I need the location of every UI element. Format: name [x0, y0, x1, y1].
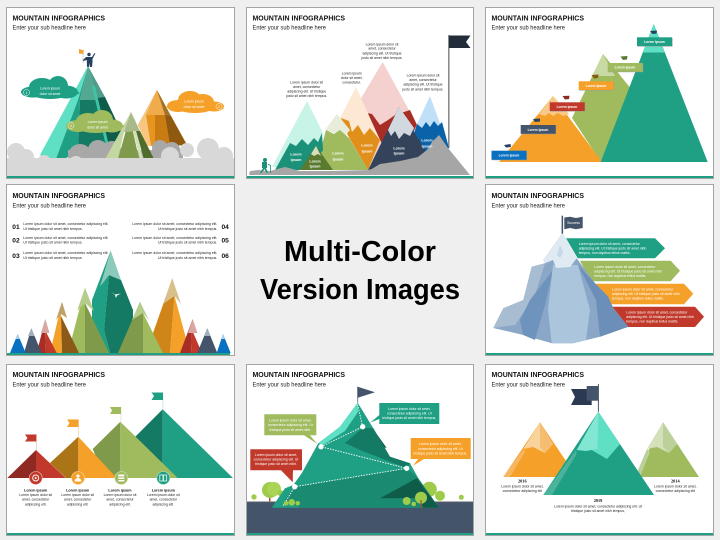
text: red column: [19, 488, 52, 506]
callout: green cloud: Lorem ipsum: [88, 120, 108, 124]
list: left items: [12, 222, 109, 260]
text: teal column: [147, 488, 180, 506]
banner: orange step: [595, 284, 693, 304]
title: central caption: Version Images: [260, 274, 460, 306]
callout: green: Lorem ipsum dolor sit amet,: [269, 418, 312, 422]
illustration: orange flag peak: [50, 419, 117, 478]
illustration: green 2014 peak: [635, 422, 699, 477]
step label: green: [608, 56, 643, 72]
illustration: pink mountain: [340, 62, 420, 170]
callout: orange: [411, 438, 471, 466]
labels: mountain names: Ipsum: [362, 149, 373, 153]
text: red column: adipiscing elit.: [25, 502, 47, 506]
banner: orange step: adipiscing elit. Ut tristique justo sit amet nibh: [612, 292, 680, 296]
labels: mountain names: Ipsum: [394, 151, 405, 155]
text: 2016 note: Lorem ipsum dolor sit amet,: [501, 484, 544, 488]
panel: snow peaks slide: [246, 7, 474, 179]
panel: climbing route slide: [246, 364, 474, 536]
list: right items: [132, 222, 229, 260]
banner: orange step: tempus, non dapibus tellus mattis.: [612, 296, 664, 300]
icon: green stack: [115, 472, 128, 484]
text: orange mountain note: consectetur.: [342, 80, 361, 84]
illustration: teal 2019 peak: [543, 412, 654, 495]
callout: orange cloud: Lorem ipsum: [184, 100, 204, 104]
banner: red step: adipiscing elit. Ut tristique justo sit amet nibh: [626, 315, 694, 319]
banner: green step: adipiscing elit. Ut tristique justo sit amet nibh: [594, 270, 662, 274]
heading: slide 5 title: MOUNTAIN INFOGRAPHICS: [492, 191, 584, 200]
text: orange column: [61, 488, 94, 506]
list: left items: 02: [12, 238, 20, 245]
callout: teal: [370, 403, 439, 424]
banner: green step: tempus, non dapibus tellus mattis.: [594, 274, 646, 278]
callout: red: [250, 449, 302, 482]
text: 2014 note: 2014: [671, 478, 680, 484]
callout: red: consectetur adipiscing elit. Ut: [254, 458, 298, 462]
illustration: teal mountain: [272, 101, 323, 170]
text: pink mountain note: adipiscing elit. Ut tristique: [363, 51, 402, 55]
illustration: teal pyramid mountain: [40, 66, 122, 164]
panel: cloud peaks slide: [6, 7, 235, 179]
text: green column: [104, 488, 136, 506]
icon: climber with flag: [79, 49, 95, 67]
callout: teal: Lorem ipsum dolor sit amet,: [388, 407, 431, 411]
list: right items: Ut tristique justo sit amet nibh tempus.: [158, 227, 217, 231]
labels: mountain names: Lorem: [421, 138, 433, 142]
list: left items: 01: [12, 224, 20, 231]
text: teal mountain note: amet, consectetur: [293, 85, 321, 89]
list: left items: Lorem ipsum dolor sit amet, consectetur adipiscing elit.: [23, 222, 109, 226]
illustration: green pyramid mountain: [103, 112, 156, 163]
callout: green: tristique justo sit amet nibh.: [269, 428, 311, 432]
illustration: orange mountain: [499, 96, 602, 162]
text: 2019 note: Lorem ipsum dolor sit amet, consectetur adipiscing elit. Ut: [554, 504, 642, 508]
text: 2014 note: [654, 478, 697, 493]
callout: orange: tristique justo sit amet nibh tempus,: [413, 452, 467, 456]
labels: mountain names: Lorem: [290, 152, 302, 156]
callout: orange: consectetur adipiscing elit. Ut: [418, 447, 463, 451]
icon: red target: [29, 472, 42, 484]
labels: mountain names: [290, 138, 433, 168]
text: 2014 note: Lorem ipsum dolor sit amet,: [654, 484, 697, 488]
icon: orange person: [72, 472, 84, 484]
text: slide 6 sub headline: Enter your sub headline here: [12, 381, 86, 388]
illustration: grey ridge: [249, 135, 470, 175]
illustration: orange right peak: [146, 278, 190, 353]
text: teal column: amet, consectetur: [150, 498, 178, 502]
illustration: slate peaks: [24, 328, 217, 353]
illustration: green flag peak: [93, 407, 178, 478]
illustration: light grey foreground clouds: [7, 138, 234, 176]
text: orange mountain note: Lorem ipsum: [342, 71, 362, 75]
icon: white bird: [111, 292, 121, 298]
labels: mountain names: Lorem: [361, 143, 373, 147]
illustration: dotted route: [283, 405, 409, 506]
list: right items: Lorem ipsum dolor sit amet, consectetur adipiscing elit.: [132, 222, 217, 226]
list: left items: Ut tristique justo sit amet nibh tempus.: [23, 227, 83, 231]
illustration: dark grey back cloud: [68, 140, 183, 170]
text: orange column: amet, consectetur: [64, 498, 92, 502]
callout: green cloud: 3: [70, 124, 72, 128]
list: right items: 05: [222, 238, 229, 245]
text: red column: Lorem ipsum: [24, 488, 48, 492]
panel: rocky mountain steps slide: [485, 184, 714, 356]
banner: green step: Lorem ipsum dolor sit amet, consectetur: [594, 265, 656, 269]
text: orange column: Lorem ipsum: [66, 488, 90, 492]
callout: red: tristique justo sit amet nibh.: [255, 462, 297, 466]
text: green column: adipiscing elit.: [109, 502, 131, 506]
banner: teal step: Lorem ipsum dolor sit amet, consectetur: [579, 242, 641, 246]
illustration: foreground trees: [284, 492, 427, 508]
text: orange column: adipiscing elit.: [67, 502, 89, 506]
text: blue mountain note: justo sit amet nibh tempus.: [402, 87, 443, 91]
text: red column: amet, consectetur: [22, 498, 50, 502]
text: slide 1 sub headline: Enter your sub headline here: [12, 24, 86, 31]
list: right items: Lorem ipsum dolor sit amet, consectetur adipiscing elit.: [132, 251, 217, 255]
illustration: orange 2016 peak: [503, 422, 577, 477]
callout: green: [264, 414, 317, 444]
text: blue mountain note: Lorem ipsum dolor sit: [407, 73, 439, 77]
text: red column: Lorem ipsum dolor sit: [19, 493, 52, 497]
text: slide 5 sub headline: Enter your sub headline here: [492, 202, 565, 209]
text: 2019 note: tristique justo sit amet nibh tempus,: [571, 509, 625, 513]
text: pink mountain note: amet, consectetur: [368, 47, 397, 51]
banner: red step: tempus, non dapibus tellus mattis.: [626, 320, 678, 324]
list: right items: 04: [222, 224, 229, 231]
panel: timeline peaks slide: [485, 364, 714, 536]
heading: slide 1 title: MOUNTAIN INFOGRAPHICS: [12, 13, 105, 22]
banner: red step: [612, 307, 704, 327]
illustration: red peaks: [37, 319, 202, 353]
illustration: central teal peak: [92, 251, 133, 353]
heading: slide 3 title: MOUNTAIN INFOGRAPHICS: [492, 13, 584, 22]
text: slide 2 sub headline: Enter your sub headline here: [252, 24, 326, 31]
callout: green: consectetur adipiscing elit. Ut: [268, 423, 313, 427]
list: left items: Lorem ipsum dolor sit amet, consectetur adipiscing elit.: [23, 251, 109, 255]
icon: ribbon flag: [571, 384, 599, 412]
step label: slate: [521, 118, 556, 134]
list: left items: 03: [12, 253, 20, 260]
illustration: red flag peak: [7, 434, 66, 478]
list: left items: Lorem ipsum dolor sit amet, consectetur adipiscing elit.: [23, 236, 109, 240]
heading: slide 8 title: MOUNTAIN INFOGRAPHICS: [492, 370, 584, 379]
text: teal mountain note: adipiscing elit. Ut tristique: [287, 89, 326, 93]
banner: green step: [580, 261, 680, 281]
callout: orange: Lorem ipsum dolor sit amet,: [419, 442, 462, 446]
icon: success flag: [562, 216, 583, 234]
callout: teal cloud: dolor sit amet: [40, 92, 60, 96]
title: central caption: [260, 236, 460, 306]
text: blue mountain note: adipiscing elit. Ut tristique: [404, 82, 443, 86]
illustration: small olive mountain: [300, 146, 333, 170]
illustration: dark ground: [247, 501, 473, 533]
step label: red: Lorem Ipsum: [557, 105, 577, 109]
text: slide 3 sub headline: Enter your sub headline here: [492, 24, 565, 31]
text: pink mountain note: Lorem ipsum dolor sit: [366, 42, 398, 46]
icon: teal book: [157, 472, 170, 484]
illustration: green right peak: [118, 302, 163, 353]
heading: slide 2 title: MOUNTAIN INFOGRAPHICS: [252, 13, 345, 22]
text: orange mountain note: dolor sit amet,: [341, 76, 363, 80]
banner: teal step: adipiscing elit. Ut tristique justo sit amet nibh: [579, 246, 646, 250]
step label: teal: [637, 30, 672, 46]
text: pink mountain note: justo sit amet nibh tempus.: [361, 56, 402, 60]
text: teal column: adipiscing elit.: [153, 502, 174, 506]
illustration: orange left peak: [50, 302, 79, 353]
step label: blue: Lorem Ipsum: [499, 154, 519, 158]
illustration: background trees: [251, 482, 464, 502]
step label: red: [550, 96, 585, 112]
illustration: blue mountain: [412, 96, 449, 158]
list: right items: Ut tristique justo sit amet nibh tempus.: [158, 240, 217, 244]
banner: red step: Lorem ipsum dolor sit amet, consectetur: [626, 310, 688, 314]
text: orange column: Lorem ipsum dolor sit: [61, 493, 94, 497]
illustration: slate mountain: [368, 107, 425, 170]
step label: teal: Lorem Ipsum: [644, 40, 665, 44]
callout: teal: consectetur adipiscing elit. Ut: [387, 412, 432, 416]
list: right items: Lorem ipsum dolor sit amet, consectetur adipiscing elit.: [132, 236, 217, 240]
text: teal column: Lorem ipsum: [152, 488, 176, 492]
heading: slide 6 title: MOUNTAIN INFOGRAPHICS: [12, 370, 105, 379]
illustration: cream and orange mountain: [340, 87, 380, 170]
panel: stair-step peaks slide: [485, 7, 714, 179]
illustration: teal mountain: [601, 24, 708, 162]
callout: teal cloud: Lorem ipsum: [40, 86, 60, 90]
callout: green cloud: [66, 110, 125, 133]
heading: slide 7 title: MOUNTAIN INFOGRAPHICS: [252, 370, 345, 379]
illustration: teal mountain: [272, 403, 439, 508]
callout: orange cloud: dolor sit amet: [184, 105, 204, 109]
labels: mountain names: Lorem: [332, 151, 344, 155]
icon: hiker: [260, 158, 271, 173]
callout: orange cloud: 2: [218, 105, 220, 109]
labels: mountain names: Lorem: [309, 159, 321, 163]
text: 2016 note: 2016: [518, 478, 527, 484]
banner: teal step: tempus, non dapibus tellus mattis.: [579, 251, 631, 255]
text: 2019 note: 2019: [594, 498, 602, 503]
text: green column: Lorem ipsum dolor sit: [104, 493, 136, 497]
text: teal column: Lorem ipsum dolor sit: [147, 493, 180, 497]
labels: mountain names: Ipsum: [333, 157, 344, 161]
illustration: green mountain: [318, 114, 368, 170]
text: slide 7 sub headline: Enter your sub headline here: [252, 381, 326, 388]
panel: flag peaks slide: [6, 364, 235, 536]
text: blue mountain note: amet, consectetur: [409, 78, 438, 82]
callout: teal cloud: [21, 76, 80, 99]
text: teal mountain note: Lorem ipsum dolor sit: [290, 80, 323, 84]
text: 2016 note: consectetur adipiscing elit: [503, 489, 542, 493]
step label: orange: Lorem Ipsum: [586, 84, 606, 88]
text: 2014 note: consectetur adipiscing elit: [656, 489, 695, 493]
illustration: green left peak: [68, 288, 109, 353]
labels: mountain names: Ipsum: [291, 158, 302, 162]
text: slide 4 sub headline: Enter your sub headline here: [12, 202, 86, 209]
callout: orange cloud: [166, 91, 224, 113]
labels: mountain names: Lorem: [393, 146, 405, 150]
illustration: teal flag peak: [135, 392, 233, 478]
step label: slate: Lorem Ipsum: [528, 128, 548, 132]
heading: slide 4 title: MOUNTAIN INFOGRAPHICS: [12, 191, 105, 200]
list: left items: Ut tristique justo sit amet nibh tempus.: [23, 256, 83, 260]
title: central caption: Multi-Color: [284, 236, 436, 268]
text: green column: amet, consectetur: [106, 498, 135, 502]
icon: summit flag: [448, 35, 470, 148]
text: 2016 note: [501, 478, 544, 493]
step label: blue: [492, 144, 527, 160]
labels: mountain names: Ipsum: [310, 164, 321, 168]
step label: green: Lorem Ipsum: [615, 66, 635, 70]
callout: teal: tristique justo sit amet nibh tempus,: [382, 416, 436, 420]
panel: six-point range slide: [6, 184, 235, 356]
text: slide 8 sub headline: Enter your sub headline here: [492, 381, 565, 388]
banner: orange step: Lorem ipsum dolor sit amet, consectetur: [612, 288, 674, 292]
callout: teal cloud: 1: [26, 91, 28, 95]
list: right items: Ut tristique justo sit amet nibh tempus.: [158, 256, 217, 260]
callout: green cloud: dolor sit amet: [87, 126, 108, 130]
text: teal mountain note: justo sit amet nibh tempus.: [285, 94, 327, 98]
list: left items: Ut tristique justo sit amet nibh tempus.: [23, 240, 83, 244]
text: green column: Lorem ipsum: [108, 488, 132, 492]
illustration: orange pyramid mountain: [138, 90, 187, 146]
illustration: green mountain: [572, 54, 640, 162]
icon: success flag: Success: [567, 221, 580, 225]
banner: teal step: [566, 238, 665, 258]
text: 2019 note: [554, 498, 642, 513]
icon: summit flag: [357, 387, 375, 403]
list: right items: 06: [222, 253, 229, 260]
illustration: blue peaks: [10, 334, 231, 353]
illustration: rocky blue mountain: [493, 233, 628, 343]
step label: orange: [579, 74, 614, 90]
labels: mountain names: Ipsum: [422, 144, 433, 148]
callout: red: Lorem ipsum dolor sit amet,: [255, 453, 297, 457]
